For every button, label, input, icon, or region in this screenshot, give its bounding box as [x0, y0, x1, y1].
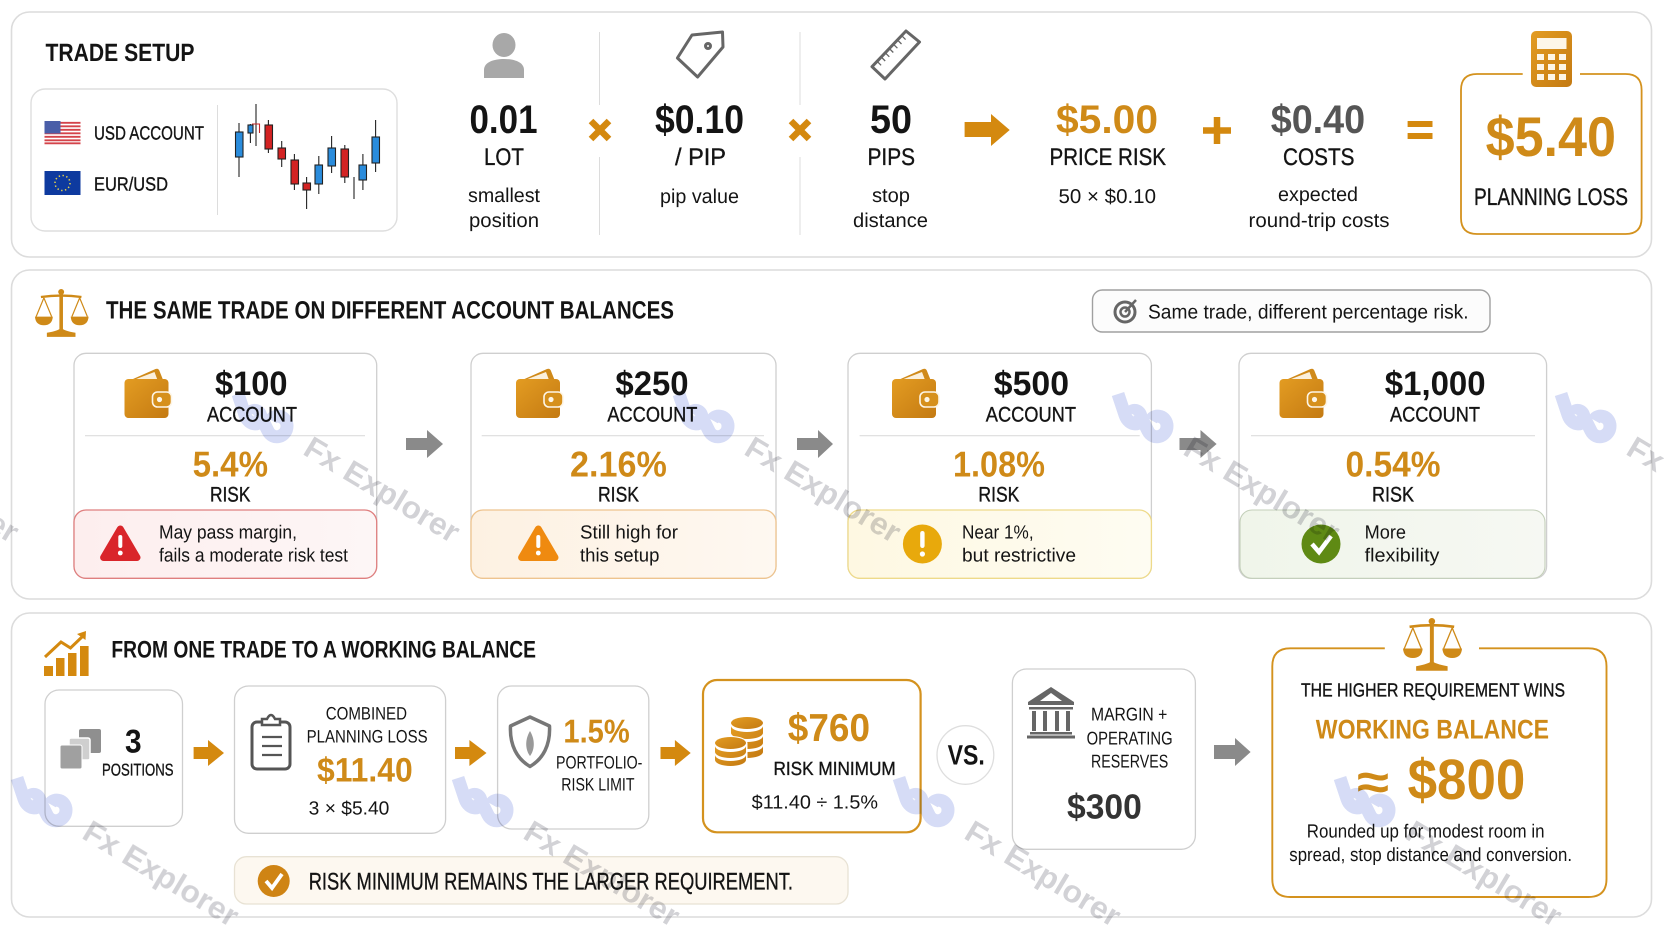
box: combined planning loss: COMBINED — [326, 703, 407, 723]
plus sign — [1203, 117, 1231, 144]
status: still high: this setup — [580, 546, 659, 567]
watermark: Fx Explorer — [0, 394, 1664, 928]
account and pair box — [31, 89, 397, 231]
box: margin and operating reserves — [1012, 669, 1195, 849]
box: working balance result: THE HIGHER REQUIREMENT WINS — [1301, 681, 1565, 702]
vs badge: VS. — [948, 739, 985, 770]
card: $500 account: $500 — [994, 365, 1069, 403]
card: $100 account: 5.4% — [193, 444, 268, 485]
icon: EU flag — [44, 171, 80, 195]
watermark: Fx Explorer: Fx Explorer — [1178, 430, 1346, 550]
box: portfolio risk limit: RISK LIMIT — [561, 774, 635, 794]
box: risk minimum: $760 — [788, 707, 870, 750]
icon: price tag — [677, 32, 723, 77]
box: working balance result: WORKING BALANCE — [1316, 714, 1549, 744]
callout: same trade — [1092, 290, 1490, 332]
card: $250 account: $250 — [615, 365, 689, 403]
pips column: PIPS — [868, 144, 915, 171]
watermark: Fx Explorer: Fx Explorer — [518, 814, 686, 928]
box: risk minimum — [703, 680, 921, 832]
box: working balance result: $800 — [1408, 748, 1525, 812]
card: $500 account: 1.08% — [953, 444, 1045, 485]
card: $1,000 account: ACCOUNT — [1390, 404, 1480, 427]
card: $1,000 account — [1239, 353, 1547, 578]
icon: person — [484, 33, 524, 78]
arrow — [455, 740, 486, 766]
lot column: smallest — [468, 185, 540, 207]
price risk column: PRICE RISK — [1050, 144, 1166, 171]
status: near 1% — [848, 510, 1151, 578]
box: combined planning loss: PLANNING LOSS — [307, 727, 428, 747]
card: $500 account: ACCOUNT — [986, 404, 1076, 427]
status: near 1%: but restrictive — [962, 546, 1076, 567]
callout: same trade: Same trade, different percentage risk. — [1148, 301, 1469, 323]
label: USD account: USD ACCOUNT — [94, 124, 204, 144]
costs column: $0.40 — [1271, 98, 1365, 142]
divider lines — [600, 32, 800, 235]
arrow — [797, 430, 833, 458]
candlestick chart — [236, 104, 380, 209]
status: more flexibility: flexibility — [1365, 546, 1440, 567]
card: $1,000 account: RISK — [1372, 484, 1414, 507]
status: near 1%: Near 1%, — [962, 522, 1034, 543]
panel: same trade on different balances — [12, 270, 1652, 599]
card: $250 account: 2.16% — [570, 444, 667, 485]
box: combined planning loss — [234, 686, 446, 833]
icon: calculator — [1531, 31, 1572, 87]
status: still high — [471, 510, 776, 578]
lot column — [468, 33, 540, 232]
costs column: expected — [1278, 184, 1358, 206]
box: margin and operating reserves: OPERATING — [1087, 727, 1173, 748]
pips column: stop — [872, 185, 910, 207]
box: portfolio risk limit: 1.5% — [563, 713, 630, 750]
heading: different balances: THE SAME TRADE ON DIFFERENT ACCOUNT BALANCES — [106, 296, 674, 324]
watermark: Fx Explorer: Fx Explorer — [298, 430, 466, 550]
pips column: 50 — [870, 98, 912, 142]
status: high risk warning: fails a moderate risk test — [159, 546, 349, 567]
status: more flexibility — [1240, 510, 1545, 578]
vs badge — [937, 726, 994, 784]
lot column: 0.01 — [470, 98, 538, 142]
icon: red warning triangle — [104, 529, 137, 558]
card: $250 account — [471, 353, 776, 578]
icon: bank building — [1027, 687, 1075, 738]
box: working balance result: ≈ — [1357, 754, 1389, 810]
icon: wallet — [892, 369, 939, 418]
watermark: Fx Explorer: Fx Explorer — [77, 814, 245, 928]
card: $100 account — [74, 353, 377, 578]
watermark: Fx Explorer: Fx Explorer — [739, 430, 907, 550]
box: risk minimum: RISK MINIMUM — [774, 759, 896, 780]
price risk column — [1050, 98, 1166, 208]
icon: wallet — [124, 369, 172, 418]
box: margin and operating reserves: $300 — [1067, 787, 1142, 826]
multiply sign — [791, 121, 809, 139]
planning loss box — [1461, 31, 1642, 234]
costs column: round-trip costs — [1248, 210, 1390, 232]
status: high risk warning — [74, 510, 377, 578]
icon: orange check — [258, 865, 290, 897]
heading: working balance: FROM ONE TRADE TO A WORKING BALANCE — [111, 636, 536, 663]
pip value column: pip value — [660, 186, 739, 208]
arrow — [1180, 430, 1217, 458]
card: $1,000 account: 0.54% — [1346, 444, 1440, 485]
icon: yellow exclamation — [903, 524, 942, 564]
box: working balance result: Rounded up for modest room in — [1307, 821, 1544, 842]
box: 3 positions — [45, 690, 182, 826]
multiply sign — [591, 121, 609, 139]
callout: risk minimum remains larger — [234, 857, 848, 904]
lot column: position — [469, 210, 539, 232]
callout: risk minimum remains larger: RISK MINIMUM REMAINS THE LARGER REQUIREMENT. — [309, 868, 793, 895]
box: portfolio risk limit — [498, 686, 649, 829]
box: risk minimum: $11.40 ÷ 1.5% — [752, 792, 878, 813]
icon: green check — [1302, 524, 1340, 564]
box: combined planning loss: $11.40 — [317, 752, 413, 790]
box: 3 positions: 3 — [125, 723, 142, 760]
box: margin and operating reserves: RESERVES — [1091, 751, 1168, 772]
arrow — [406, 430, 443, 458]
box: 3 positions: POSITIONS — [102, 761, 174, 780]
pips column — [853, 31, 928, 232]
card: $1,000 account: $1,000 — [1385, 365, 1486, 403]
card: $250 account: ACCOUNT — [607, 404, 698, 427]
arrow — [660, 740, 691, 766]
box: portfolio risk limit: PORTFOLIO- — [556, 752, 642, 772]
card: $100 account: RISK — [210, 484, 250, 507]
icon: stacked squares — [60, 729, 101, 769]
card: $500 account: RISK — [978, 484, 1019, 507]
icon: wallet — [516, 369, 563, 418]
costs column: COSTS — [1283, 144, 1354, 171]
icon: balance scale — [35, 289, 89, 337]
pip value column: / PIP — [675, 144, 726, 171]
icon: shield — [510, 717, 550, 766]
icon: coin stacks — [714, 717, 763, 770]
box: margin and operating reserves: MARGIN + — [1091, 704, 1167, 725]
pip value column: $0.10 — [655, 98, 744, 142]
box: working balance result — [1272, 618, 1606, 897]
watermark: Fx Explorer: Fx Explorer — [1400, 814, 1568, 928]
arrow — [1214, 738, 1251, 766]
icon: ruler — [872, 31, 920, 79]
planning loss box: $5.40 — [1486, 105, 1616, 168]
price risk column: 50 × $0.10 — [1058, 186, 1156, 208]
equals sign — [1408, 124, 1432, 136]
arrow — [965, 114, 1010, 146]
box: working balance result: spread, stop distance and conversion. — [1289, 845, 1572, 866]
status: still high: Still high for — [580, 522, 679, 543]
planning loss box: PLANNING LOSS — [1474, 184, 1628, 211]
heading: trade setup: TRADE SETUP — [46, 39, 194, 67]
icon: wallet — [1280, 369, 1326, 418]
card: $500 account — [848, 353, 1151, 578]
panel: trade setup — [12, 12, 1652, 257]
icon: US flag — [44, 121, 80, 144]
price risk column: $5.00 — [1056, 98, 1158, 142]
panel: from one trade to a working balance — [12, 613, 1652, 917]
icon: orange warning triangle — [522, 529, 555, 558]
label: EUR/USD: EUR/USD — [94, 174, 168, 196]
lot column: LOT — [484, 144, 524, 171]
arrow — [194, 740, 224, 766]
status: more flexibility: More — [1365, 522, 1406, 543]
icon: clipboard — [252, 715, 290, 769]
card: $100 account: ACCOUNT — [207, 404, 297, 427]
status: high risk warning: May pass margin, — [159, 522, 297, 543]
card: $250 account: RISK — [598, 484, 639, 507]
watermark: Fx Explorer: Fx Explorer — [959, 814, 1127, 928]
icon: growth chart — [44, 631, 89, 676]
card: $100 account: $100 — [215, 365, 288, 403]
pips column: distance — [853, 210, 928, 232]
box: combined planning loss: 3 × $5.40 — [309, 798, 389, 819]
icon: balance scale — [1403, 618, 1462, 671]
icon: target — [1115, 300, 1136, 322]
pip value column — [655, 32, 744, 208]
costs column — [1248, 98, 1390, 232]
